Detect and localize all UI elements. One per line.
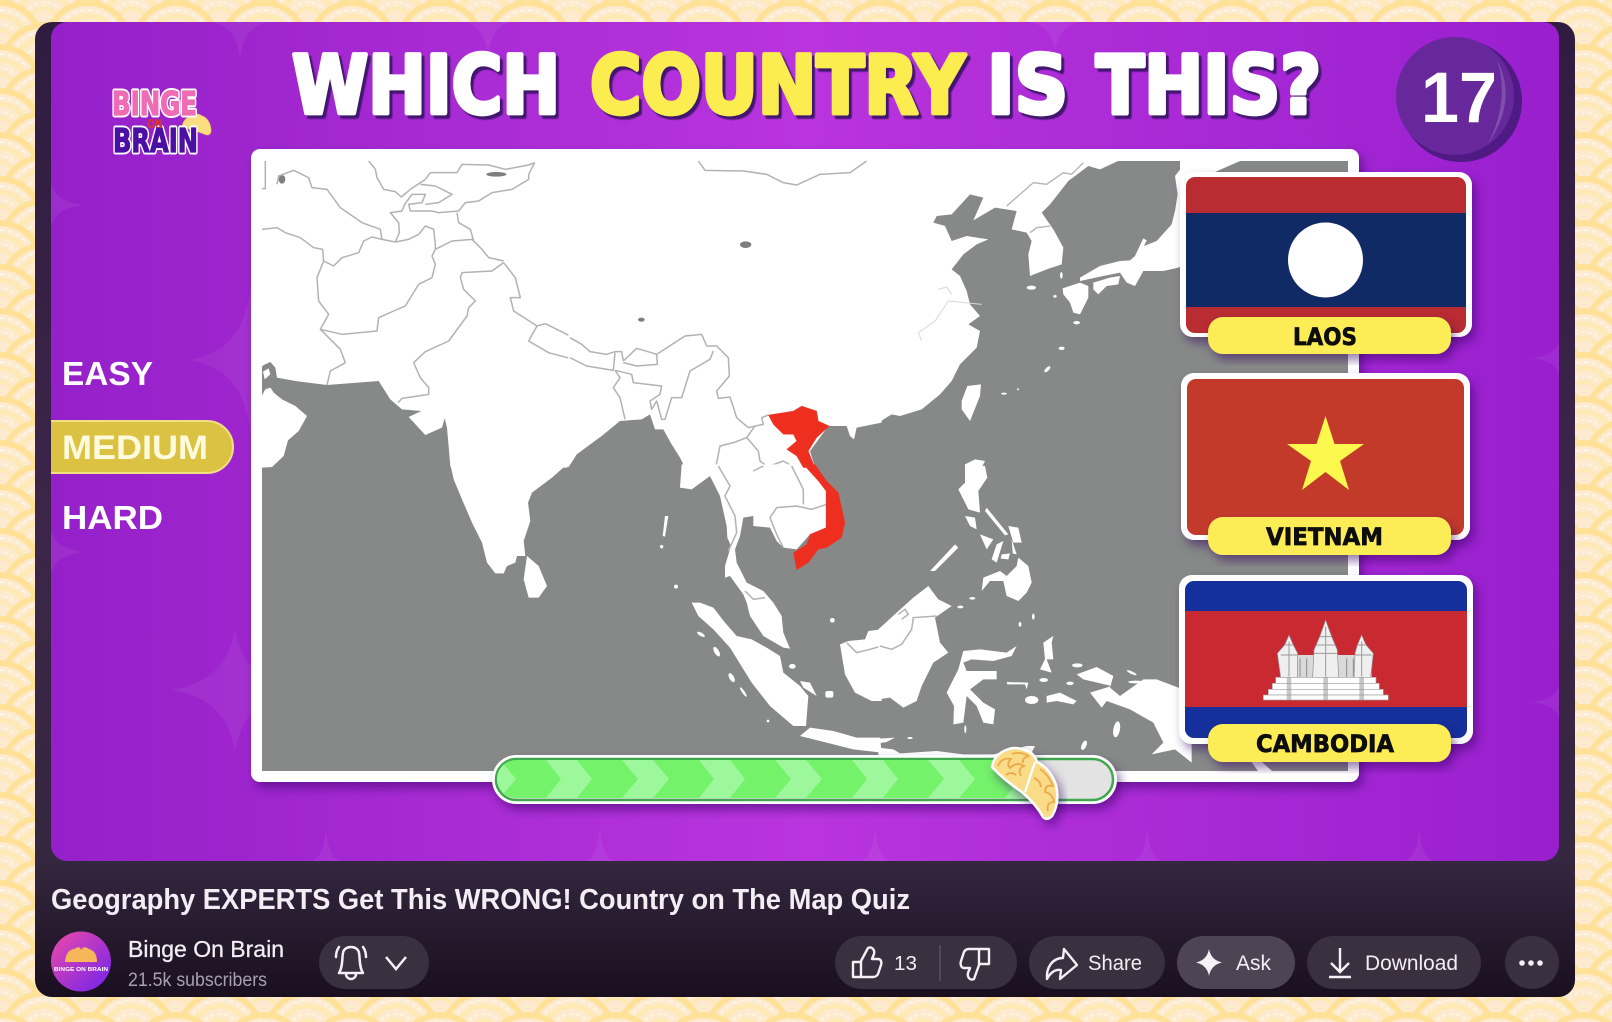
icon: sparkle [1196,949,1222,976]
channel avatar [51,932,111,992]
icon: chevron down [386,957,406,969]
quiz panel [51,22,1559,861]
logo: Binge On Brain: BINGE [112,84,197,123]
question number badge [1396,37,1522,162]
download button: Download [1365,952,1458,975]
title: IS [987,39,1068,132]
subscriber count: 21.5k subscribers [128,970,267,991]
Vietnam highlighted in red [768,406,845,570]
progress chevrons [469,760,1040,798]
flag of Vietnam [1187,379,1464,535]
label: Vietnam: VIETNAM [1266,523,1383,551]
difficulty: easy: EASY [62,355,153,392]
logo: Binge On Brain: BINGE [112,84,197,123]
channel name: Binge On Brain [128,936,284,962]
logo brain [182,114,211,135]
brain progress marker [992,748,1057,819]
land: Philippines, Borneo, Sulawesi, New Guinea [878,466,1192,763]
answer card: Cambodia [1179,575,1473,762]
label: Vietnam [1208,517,1451,555]
ask button [1177,936,1295,989]
answer card: Laos [1180,172,1472,354]
answer card: Vietnam [1181,373,1470,555]
land: west [260,159,574,468]
icon: thumbs up [853,947,881,977]
progress fill [497,760,1025,798]
map frame [251,149,1359,782]
land: south India and Sri Lanka [450,464,567,598]
ask button: Ask [1236,952,1271,975]
more options button [1505,936,1559,989]
land: central [568,159,882,468]
channel avatar: BINGE ON BRAIN [54,967,108,973]
map of Asia [260,159,1348,771]
icon: thumbs down [961,949,989,980]
land: Southeast Asia mainland, Sumatra, Java [660,464,882,753]
label: Laos [1208,317,1451,354]
difficulty: hard: HARD [62,499,163,536]
Angkor Wat emblem [1263,620,1388,700]
flag of Cambodia [1185,581,1467,738]
title: COUNTRY [590,39,966,132]
share button: Share [1088,952,1142,975]
share button [1029,936,1165,989]
progress bar [469,755,1117,804]
question number badge: 17 [1421,59,1497,138]
land: east islands visible top [1180,161,1240,172]
icon: share arrow [1047,949,1077,979]
title: THIS? [1096,39,1321,132]
label: Cambodia [1208,724,1451,762]
notification button [319,936,429,989]
download button [1307,936,1481,989]
video title: Geography EXPERTS Get This WRONG! Country on The Map Quiz [51,884,910,916]
label: Cambodia: CAMBODIA [1256,730,1394,758]
like and dislike button [835,936,1017,989]
logo: Binge On Brain: BRAIN [113,121,198,160]
icon: download arrow [1329,948,1351,977]
title [292,39,1321,132]
land: east Asia and Japan [878,159,1192,468]
title: WHICH [292,39,560,132]
flag of Laos [1186,177,1466,333]
logo: Binge On Brain: BRAIN [113,121,198,160]
like count: 13 [894,953,917,975]
icon: bell [336,947,366,979]
difficulty: medium highlighted [51,421,233,473]
label: Laos: LAOS [1293,323,1357,351]
far-south land at map bottom [1252,762,1272,771]
logo: Binge On Brain [112,84,211,160]
difficulty: medium highlighted: MEDIUM [62,429,208,467]
logo: Binge On Brain: ON [147,117,163,131]
